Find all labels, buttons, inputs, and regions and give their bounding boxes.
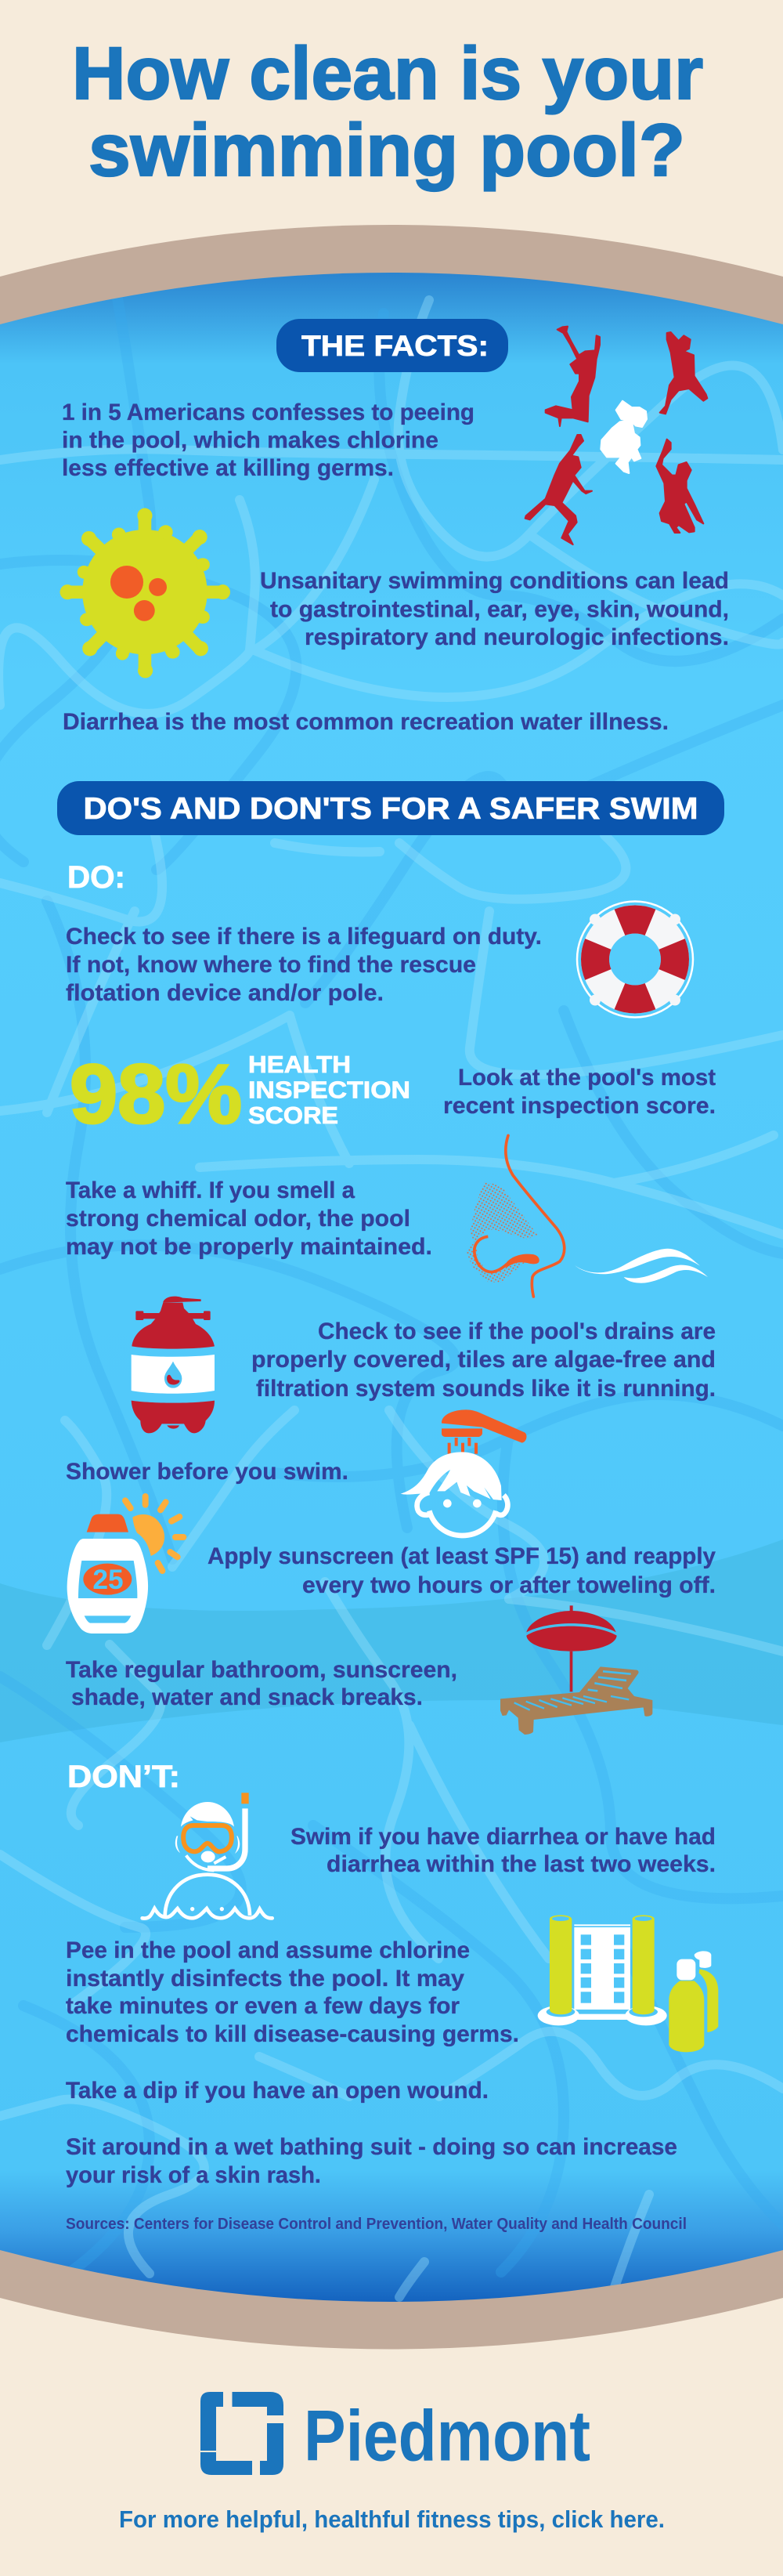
text: pee warning: Pee in the pool and assume chlorine bbox=[66, 1937, 470, 1963]
text: diarrhea warning bbox=[290, 1824, 716, 1877]
icon: sunscreen and sun bbox=[67, 1496, 183, 1634]
text: pee warning: instantly disinfects the pool. It may bbox=[66, 1966, 464, 1992]
icon: pool filter bbox=[132, 1297, 215, 1433]
wordmark: Piedmont bbox=[304, 2396, 590, 2476]
text: take a whiff: strong chemical odor, the pool bbox=[66, 1206, 410, 1232]
stat: 98% health inspection score: 98% bbox=[70, 1047, 242, 1141]
icon: pool noodles and chemical bottles bbox=[538, 1915, 718, 2052]
heading: do: DO: bbox=[67, 860, 125, 895]
text: pee warning: take minutes or even a few days for bbox=[66, 1993, 460, 2019]
title: swimming pool? bbox=[88, 109, 685, 192]
stat: 98% health inspection score bbox=[70, 1047, 410, 1141]
icon: life ring bbox=[577, 901, 693, 1017]
text: diarrhea warning: diarrhea within the last two weeks. bbox=[327, 1851, 716, 1877]
heading pill: the facts bbox=[276, 319, 508, 372]
text: lifeguard: Check to see if there is a lifeguard on duty. bbox=[66, 924, 542, 950]
text: pee warning bbox=[66, 1937, 519, 2047]
panel: do list bbox=[66, 860, 716, 1735]
text: infections fact: to gastrointestinal, ear, eye, skin, wound, bbox=[270, 597, 729, 622]
text: inspection score: recent inspection score. bbox=[443, 1093, 716, 1119]
panel: don't list bbox=[66, 1760, 718, 2233]
text: diarrhea warning: Swim if you have diarrhea or have had bbox=[290, 1824, 716, 1850]
icon: snorkeler bbox=[143, 1793, 272, 1919]
icon: Piedmont brackets bbox=[200, 2392, 283, 2475]
heading pill: do's and don'ts bbox=[57, 781, 724, 835]
icon: nose and scent waves bbox=[466, 1135, 708, 1297]
water caustics bbox=[0, 298, 783, 2297]
text: lifeguard: flotation device and/or pole. bbox=[66, 980, 384, 1006]
text: lifeguard bbox=[66, 924, 542, 1006]
text: peeing fact: less effective at killing germs. bbox=[62, 455, 394, 481]
icon: child under shower bbox=[401, 1409, 526, 1536]
icon: jumping swimmers bbox=[525, 327, 707, 545]
text: lifeguard: If not, know where to find the rescue bbox=[66, 952, 476, 978]
text: infections fact bbox=[260, 568, 729, 650]
sources: Sources: Centers for Disease Control and Prevention, Water Quality and Health Council bbox=[66, 2216, 687, 2233]
text: infections fact: respiratory and neurologic infections. bbox=[305, 624, 729, 650]
text: regular breaks: Take regular bathroom, sunscreen, bbox=[66, 1657, 457, 1683]
text: sunscreen bbox=[207, 1543, 716, 1598]
text: wet bathing suit: Sit around in a wet bathing suit - doing so can increase bbox=[66, 2134, 677, 2160]
text: open wound: Take a dip if you have an open wound. bbox=[66, 2078, 489, 2104]
icon: sunscreen and sun: 25 bbox=[92, 1565, 124, 1595]
icon: germ bbox=[60, 508, 230, 678]
text: take a whiff: may not be properly maintained. bbox=[66, 1234, 432, 1260]
stat: 98% health inspection score: SCORE bbox=[248, 1102, 338, 1129]
panel: the facts bbox=[60, 319, 729, 735]
pool water bbox=[0, 273, 783, 2302]
text: diarrhea fact: Diarrhea is the most common recreation water illness. bbox=[63, 709, 669, 735]
text: sunscreen: every two hours or after toweling off. bbox=[302, 1572, 716, 1598]
title bbox=[72, 32, 703, 192]
text: peeing fact: 1 in 5 Americans confesses to peeing bbox=[62, 400, 474, 425]
text: pee warning: chemicals to kill disease-causing germs. bbox=[66, 2021, 519, 2047]
text: inspection score bbox=[443, 1065, 716, 1119]
logo: Piedmont bbox=[200, 2392, 590, 2476]
text: sunscreen: Apply sunscreen (at least SPF 15) and reapply bbox=[207, 1543, 716, 1569]
call to action: For more helpful, healthful fitness tips, click here. bbox=[119, 2505, 665, 2533]
text: regular breaks: shade, water and snack breaks. bbox=[71, 1684, 423, 1710]
icon: umbrella and lounge chair bbox=[500, 1605, 652, 1735]
text: inspection score: Look at the pool's most bbox=[458, 1065, 716, 1091]
text: drains and filtration bbox=[251, 1319, 716, 1402]
text: peeing fact bbox=[62, 400, 474, 481]
text: wet bathing suit bbox=[66, 2134, 677, 2188]
heading pill: the facts: THE FACTS: bbox=[301, 330, 489, 362]
heading pill: do's and don'ts: DO'S AND DON'TS FOR A SAFER SWIM bbox=[83, 792, 698, 826]
heading: don't: DON’T: bbox=[67, 1760, 180, 1794]
text: infections fact: Unsanitary swimming conditions can lead bbox=[260, 568, 729, 594]
text: take a whiff: Take a whiff. If you smell a bbox=[66, 1178, 355, 1203]
text: shower: Shower before you swim. bbox=[66, 1459, 348, 1485]
stat: 98% health inspection score: INSPECTION bbox=[248, 1076, 410, 1103]
text: drains and filtration: properly covered, tiles are algae-free and bbox=[251, 1347, 716, 1373]
title: How clean is your bbox=[72, 32, 703, 115]
text: peeing fact: in the pool, which makes chlorine bbox=[62, 428, 438, 453]
stat: 98% health inspection score: HEALTH bbox=[248, 1051, 351, 1078]
text: regular breaks bbox=[66, 1657, 457, 1710]
text: wet bathing suit: your risk of a skin rash. bbox=[66, 2162, 321, 2188]
text: drains and filtration: Check to see if the pool's drains are bbox=[318, 1319, 716, 1344]
text: take a whiff bbox=[66, 1178, 432, 1260]
text: drains and filtration: filtration system sounds like it is running. bbox=[256, 1376, 716, 1402]
